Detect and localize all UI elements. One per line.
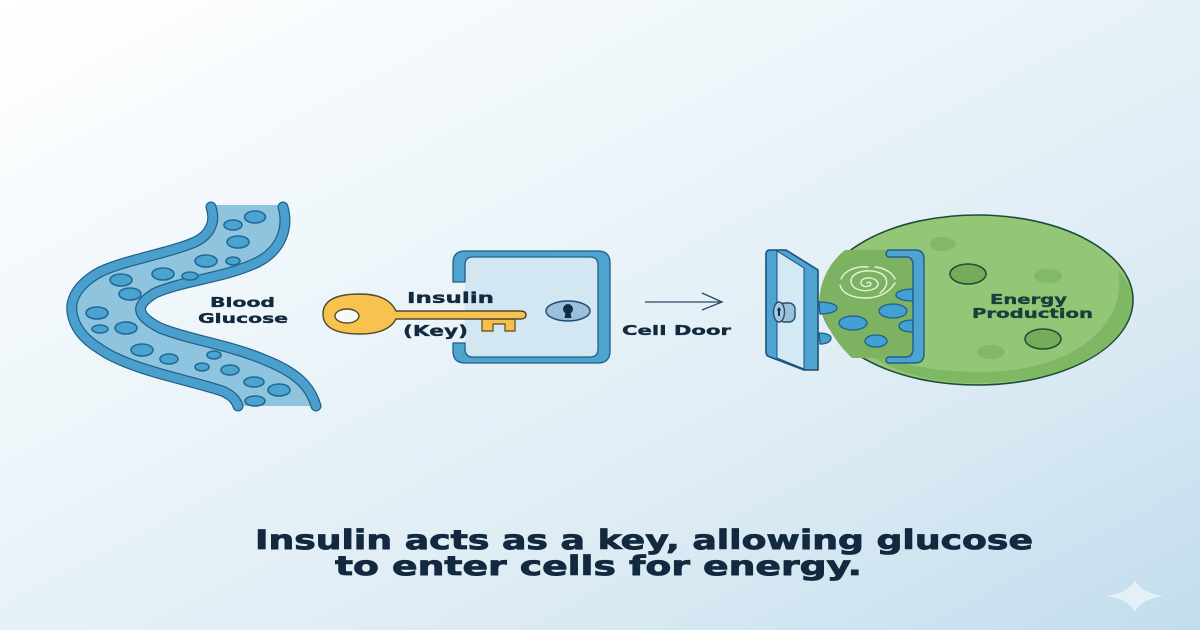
cell organelles — [930, 237, 1062, 359]
panel: green cell — [819, 215, 1133, 385]
label: Energy Production — [972, 292, 1093, 322]
label: Cell Door: Cell Door — [622, 323, 732, 339]
icon: energy spiral — [840, 267, 895, 298]
label: (Key): (Key) — [403, 322, 468, 340]
label: Blood Glucose: Glucose — [198, 311, 288, 327]
label: Energy Production: Production — [972, 306, 1093, 322]
glucose entering the cell — [819, 289, 913, 347]
icon: golden key — [323, 294, 526, 334]
icon: sparkle — [1107, 580, 1163, 612]
inner membrane bracket — [886, 250, 924, 363]
icon: open door — [766, 250, 818, 370]
panel: blood vessel with glucose — [72, 205, 316, 406]
label: Energy Production: Energy — [990, 292, 1067, 308]
caption — [255, 525, 1033, 582]
label: Blood Glucose — [198, 295, 288, 327]
door handle — [774, 302, 795, 322]
caption: to enter cells for energy. — [335, 551, 862, 582]
label: Insulin: Insulin — [407, 289, 494, 307]
label: Blood Glucose: Blood — [210, 295, 275, 311]
panel: cell door frame — [453, 251, 610, 363]
inner darker chamber — [819, 250, 913, 358]
caption: Insulin acts as a key, allowing glucose — [255, 525, 1033, 556]
icon: keyhole — [546, 301, 590, 321]
arrow — [645, 293, 722, 310]
